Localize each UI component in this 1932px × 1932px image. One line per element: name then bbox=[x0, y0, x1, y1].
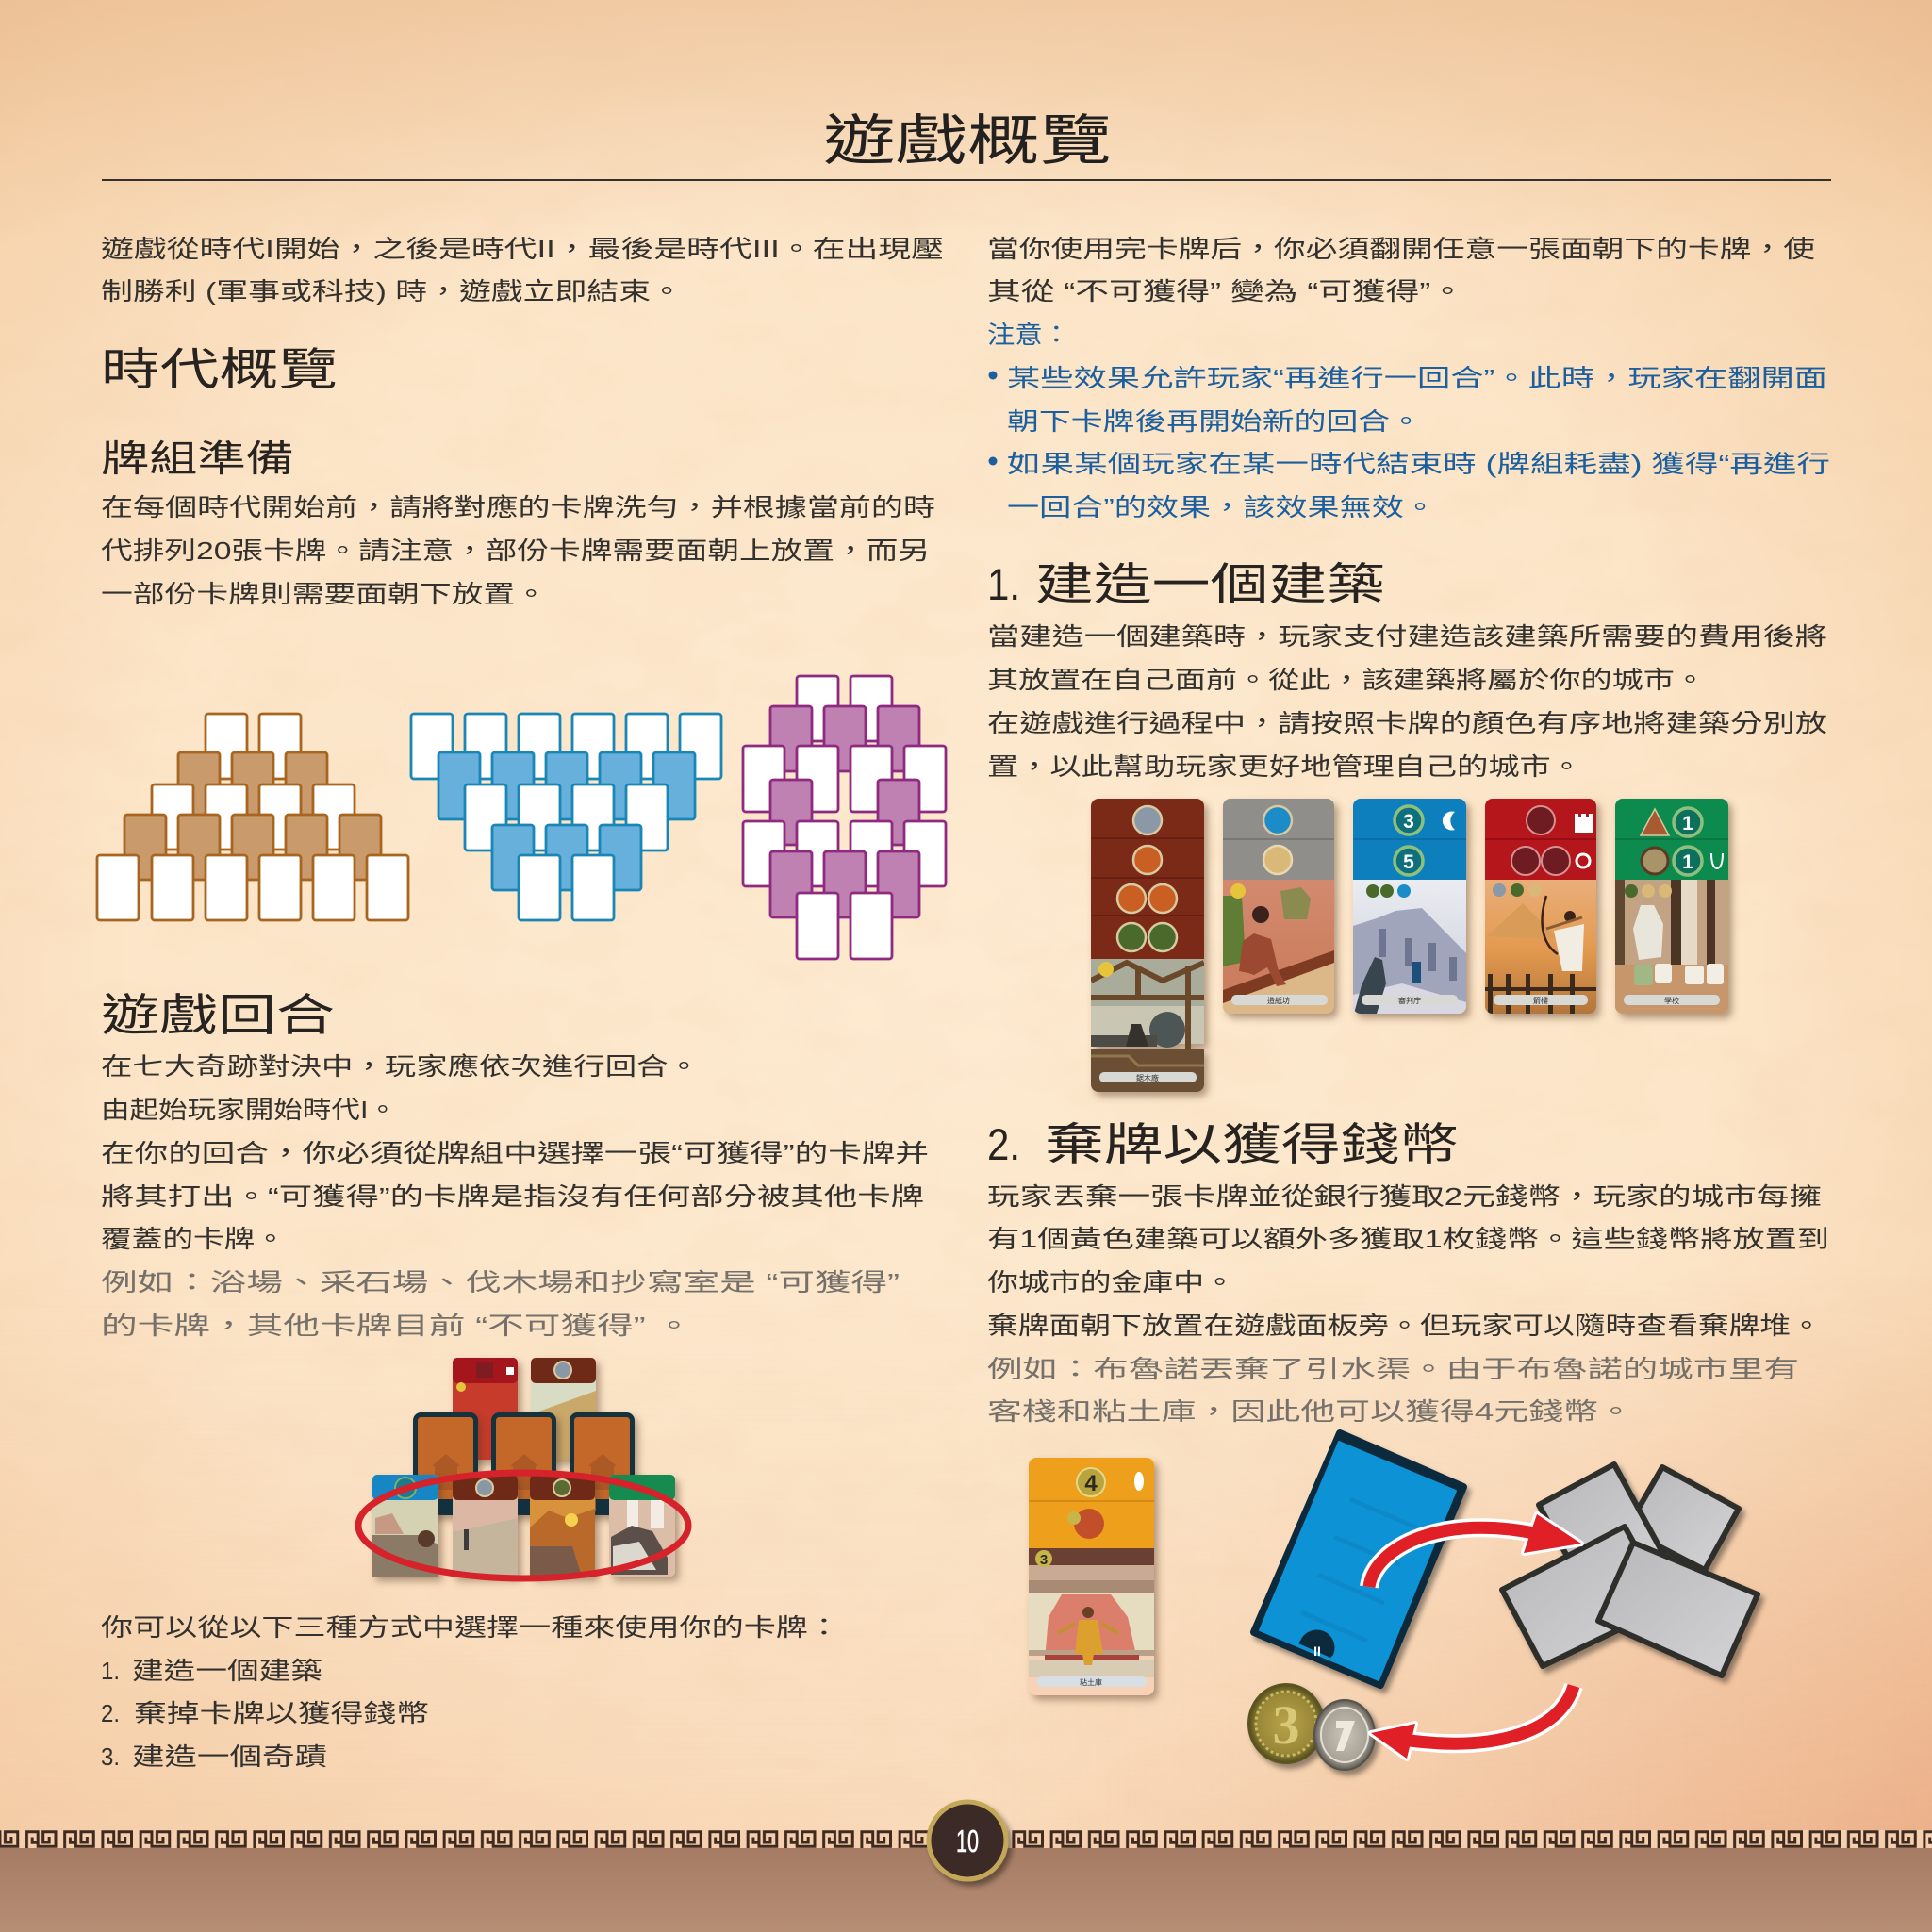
intro text: 遊戲從時代I開始，之後是時代II，最後是時代III。在出現壓 bbox=[101, 235, 944, 263]
text: build a building: 在遊戲進行過程中，請按照卡牌的顏色有序地將建築分別放 bbox=[987, 709, 1827, 737]
text: build a building: 當建造一個建築時，玩家支付建造該建築所需要的費用後將 bbox=[987, 622, 1827, 651]
arrow: discard pile to coins bbox=[1371, 1686, 1574, 1759]
intro text: 制勝利 (軍事或科技) 時，遊戲立即結束。 bbox=[101, 277, 683, 305]
text: discard for coins: 棄牌面朝下放置在遊戲面板旁。但玩家可以隨時查看棄牌堆。 bbox=[987, 1312, 1822, 1340]
card layout: age III bbox=[743, 676, 946, 959]
discard pile: grey cards bbox=[1502, 1464, 1758, 1676]
card: green school bbox=[1615, 799, 1728, 1014]
card: blue courthouse: 審判庁 bbox=[1398, 996, 1421, 1005]
coin: silver 1 bbox=[1314, 1700, 1375, 1770]
arrow: card to discard pile bbox=[1369, 1514, 1581, 1587]
text: build a building: 其放置在自己面前。從此，該建築將屬於你的城市。 bbox=[987, 666, 1706, 694]
example text: available cards: 的卡牌，其他卡牌目前 “不可獲得” 。 bbox=[101, 1312, 692, 1340]
card: yellow clay reserve: 4 bbox=[1084, 1471, 1098, 1496]
card: green school: 1 bbox=[1682, 813, 1693, 834]
card: green school: 學校 bbox=[1664, 996, 1679, 1005]
card: green school: 1 bbox=[1682, 851, 1693, 873]
text: three options: 3. bbox=[101, 1742, 120, 1771]
text: three options: 2. bbox=[101, 1699, 120, 1727]
card: red archery tower: 箭樓 bbox=[1533, 996, 1548, 1005]
example text: discard bbox=[987, 1355, 1799, 1426]
card: blue courthouse bbox=[1353, 799, 1466, 1014]
text: deck preparation bbox=[101, 493, 935, 608]
card layout: age II bbox=[411, 714, 721, 920]
text: discard for coins: 有1個黃色建築可以額外多獲取1枚錢幣。這些錢幣將放置到 bbox=[987, 1225, 1829, 1253]
note in blue: 朝下卡牌後再開始新的回合。 bbox=[1007, 407, 1422, 436]
page number badge bbox=[929, 1802, 1006, 1879]
note in blue: 一回合”的效果，該效果無效。 bbox=[1007, 493, 1436, 521]
text: deck preparation: 一部份卡牌則需要面朝下放置。 bbox=[101, 580, 547, 608]
text: right column intro: 當你使用完卡牌后，你必須翻開任意一張面朝下的卡牌，使 bbox=[987, 235, 1815, 263]
text: right column intro: 其從 “不可獲得” 變為 “可獲得”。 bbox=[987, 277, 1464, 305]
heading: build a building: 1. bbox=[987, 559, 1020, 609]
blue card back bbox=[1254, 1433, 1463, 1685]
note in blue: 某些效果允許玩家“再進行一回合”。此時，玩家在翻開面 bbox=[1007, 364, 1827, 392]
text: three options bbox=[101, 1613, 840, 1771]
text: deck preparation: 在每個時代開始前，請將對應的卡牌洗勻，并根據當前的時 bbox=[101, 493, 935, 521]
text: game turn: 在七大奇跡對決中，玩家應依次進行回合。 bbox=[101, 1052, 700, 1081]
card: yellow clay reserve bbox=[1029, 1458, 1154, 1695]
text: three options: 棄掉卡牌以獲得錢幣 bbox=[134, 1699, 429, 1727]
greek key border bbox=[0, 1830, 1932, 1848]
coin: gold 3: 3 bbox=[1273, 1694, 1299, 1756]
text: three options: 你可以從以下三種方式中選擇一種來使用你的卡牌： bbox=[101, 1613, 840, 1642]
text: build a building bbox=[987, 622, 1827, 781]
heading: discard for coins: 2. bbox=[987, 1119, 1020, 1169]
example text: available cards: 例如：浴場、采石場、伐木場和抄寫室是 “可獲得” bbox=[101, 1268, 900, 1296]
text: right column intro bbox=[987, 235, 1815, 305]
card: brown sawmill: 鋸木廠 bbox=[1136, 1073, 1159, 1082]
text: game turn: 覆蓋的卡牌。 bbox=[101, 1225, 286, 1253]
heading: discard for coins: 棄牌以獲得錢幣 bbox=[1045, 1119, 1459, 1169]
title rule bbox=[102, 179, 1831, 181]
heading: build a building: 建造一個建築 bbox=[1035, 559, 1385, 609]
heading: build a building bbox=[987, 559, 1385, 609]
red ellipse bbox=[358, 1473, 688, 1578]
text: three options: 建造一個建築 bbox=[132, 1657, 322, 1685]
text: discard for coins: 你城市的金庫中。 bbox=[987, 1268, 1235, 1296]
card: blue courthouse: 5 bbox=[1403, 851, 1414, 873]
title: 遊戲概覽 bbox=[823, 110, 1112, 172]
card layout: age I bbox=[97, 714, 408, 920]
example text: available cards bbox=[101, 1268, 900, 1340]
intro text bbox=[101, 235, 944, 305]
text: three options: 建造一個奇蹟 bbox=[132, 1742, 327, 1771]
page number badge: 10 bbox=[956, 1824, 979, 1858]
text: game turn: 在你的回合，你必須從牌組中選擇一張“可獲得”的卡牌并 bbox=[101, 1139, 929, 1167]
coin: gold 3 bbox=[1248, 1684, 1324, 1763]
blue card back: II bbox=[1313, 1643, 1321, 1659]
text: discard for coins bbox=[987, 1182, 1829, 1340]
card: grey papyrus: 造紙坊 bbox=[1267, 996, 1290, 1005]
card: yellow clay reserve: 粘土庫 bbox=[1080, 1677, 1102, 1687]
text: three options: 1. bbox=[101, 1657, 120, 1685]
card: red archery tower bbox=[1485, 799, 1596, 1014]
note in blue: 注意： bbox=[987, 321, 1070, 349]
heading: discard for coins bbox=[987, 1119, 1459, 1169]
card: grey papyrus bbox=[1223, 799, 1334, 1014]
text: build a building: 置，以此幫助玩家更好地管理自己的城市。 bbox=[987, 752, 1582, 781]
text: game turn: 由起始玩家開始時代I。 bbox=[101, 1096, 397, 1124]
heading: age overview: 時代概覽 bbox=[101, 344, 338, 394]
heading: game turn: 遊戲回合 bbox=[101, 990, 335, 1040]
example text: discard: 例如：布魯諾丟棄了引水渠。由于布魯諾的城市里有 bbox=[987, 1355, 1799, 1383]
card: brown sawmill bbox=[1091, 799, 1204, 1092]
text: game turn: 將其打出。“可獲得”的卡牌是指沒有任何部分被其他卡牌 bbox=[101, 1182, 924, 1211]
illustration: card structure with red ellipse bbox=[358, 1358, 688, 1578]
text: discard for coins: 玩家丟棄一張卡牌並從銀行獲取2元錢幣，玩家的城市每擁 bbox=[987, 1182, 1822, 1211]
text: deck preparation: 代排列20張卡牌。請注意，部份卡牌需要面朝上放置，而另 bbox=[101, 537, 930, 565]
heading: deck preparation: 牌組準備 bbox=[101, 439, 294, 480]
note in blue: 如果某個玩家在某一時代結束時 (牌組耗盡) 獲得“再進行 bbox=[1007, 450, 1830, 478]
example text: discard: 客棧和粘土庫，因此他可以獲得4元錢幣。 bbox=[987, 1397, 1633, 1426]
card: yellow clay reserve: 3 bbox=[1040, 1552, 1048, 1568]
card: blue courthouse: 3 bbox=[1403, 811, 1414, 833]
bottom band bbox=[0, 1848, 1932, 1932]
text: game turn bbox=[101, 1052, 929, 1253]
note in blue bbox=[987, 321, 1830, 521]
